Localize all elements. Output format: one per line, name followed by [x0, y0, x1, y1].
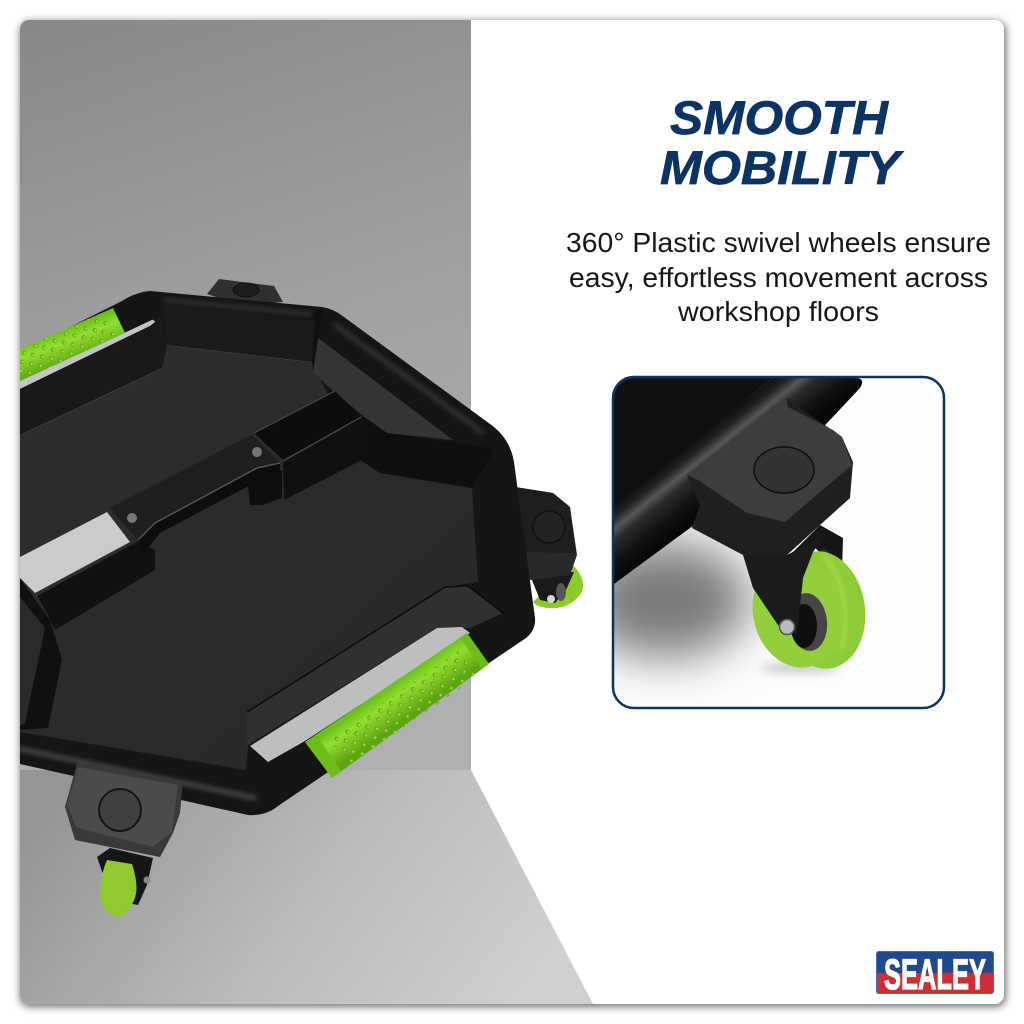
plate cap: [754, 447, 814, 493]
center handle: [110, 435, 282, 556]
bottom grip: [305, 633, 489, 778]
left upper wall: [20, 316, 167, 435]
floor shadow: [580, 542, 750, 658]
wheel hub: [792, 593, 828, 651]
title: [660, 91, 904, 194]
axle bolt: [780, 620, 794, 634]
lower left wall: [20, 578, 62, 730]
title: SMOOTH: [670, 91, 889, 144]
right shelf wall: [380, 432, 472, 488]
left-bottom caster: [65, 760, 183, 917]
background wall and floor: [20, 20, 593, 1004]
wheel tread: [810, 551, 866, 669]
body text: [566, 227, 991, 327]
plate top face: [687, 398, 852, 522]
caster fork: [743, 548, 816, 635]
wheel tread stripe: [822, 553, 844, 650]
body text: easy, effortless movement across: [569, 262, 988, 293]
top caster: [207, 279, 283, 305]
inset: caster close-up: [580, 377, 944, 708]
body text: 360° Plastic swivel wheels ensure: [566, 227, 991, 258]
tray black interior: [614, 378, 773, 506]
fork rear bracket: [793, 525, 843, 561]
center channel: [254, 391, 362, 500]
center box below panel: [37, 542, 155, 630]
left grip upper: [20, 308, 152, 381]
left upper opening: [20, 318, 156, 389]
right caster: [515, 487, 583, 608]
rim highlights: [20, 300, 482, 798]
tray outer rim: [20, 291, 535, 815]
wheel face: [752, 590, 844, 668]
top inner wall: [167, 344, 312, 362]
lower right inner wall: [246, 586, 503, 770]
center reflective panel: [20, 512, 130, 593]
upper right sloped wall: [313, 338, 453, 440]
plate body: [687, 398, 853, 555]
title: MOBILITY: [660, 141, 904, 194]
tray floor: [20, 345, 478, 770]
body text: workshop floors: [677, 296, 879, 327]
lower opening: [250, 627, 470, 762]
tube: [614, 378, 862, 584]
creeper tray product photo: [20, 279, 583, 917]
